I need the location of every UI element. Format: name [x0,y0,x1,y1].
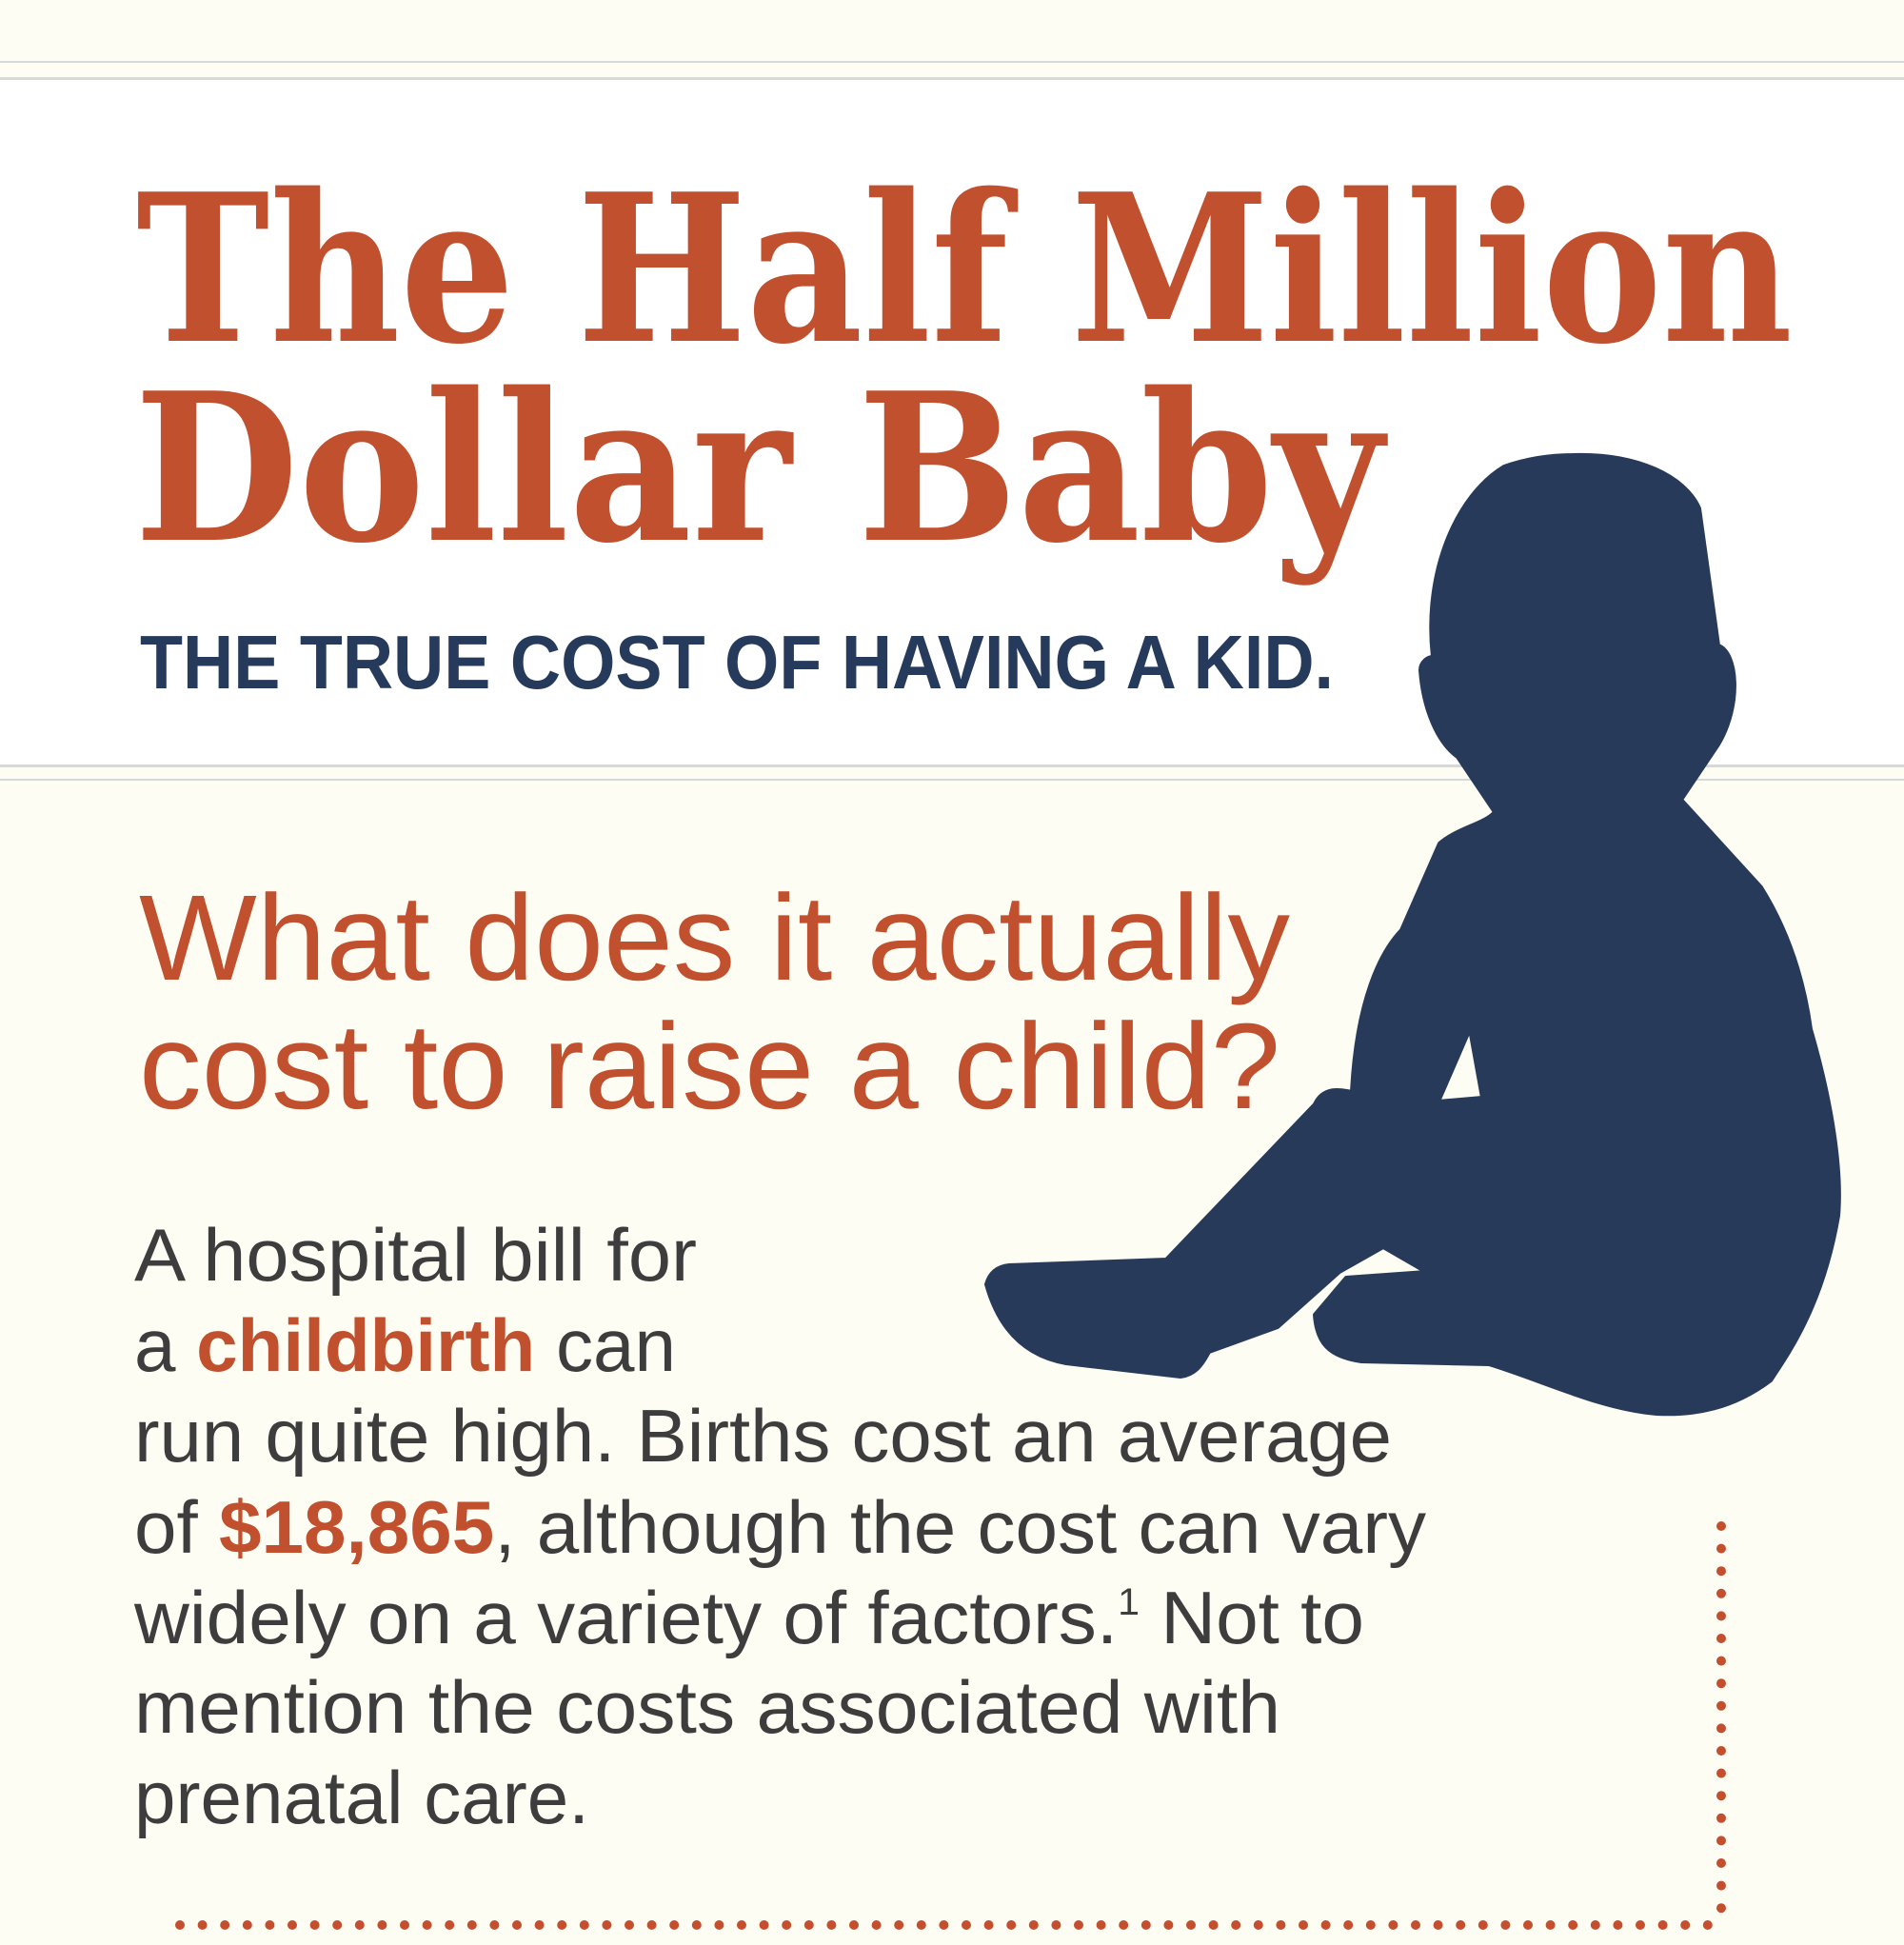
question heading [139,870,1290,1135]
body text: Not to [1140,1576,1364,1659]
question heading: cost to raise a child? [139,999,1280,1135]
body text: run quite high. Births cost an average [134,1394,1392,1478]
question heading: What does it actually [139,870,1290,1006]
body text: A hospital bill for [134,1213,697,1297]
title [134,149,1793,588]
title: Dollar Baby [134,347,1389,588]
body text: a childbirth can [134,1303,676,1387]
subtitle: THE TRUE COST OF HAVING A KID. [140,620,1334,705]
body text: 1 [1118,1581,1140,1623]
body text: widely on a variety of factors. [134,1576,1092,1659]
body text: mention the costs associated with [134,1665,1280,1749]
body text: prenatal care. [134,1756,589,1839]
body text: of $18,865, although the cost can vary [134,1485,1426,1569]
body text [133,1213,1426,1839]
icon: baby silhouette [986,455,1839,1414]
dotted border [180,1526,1721,1925]
